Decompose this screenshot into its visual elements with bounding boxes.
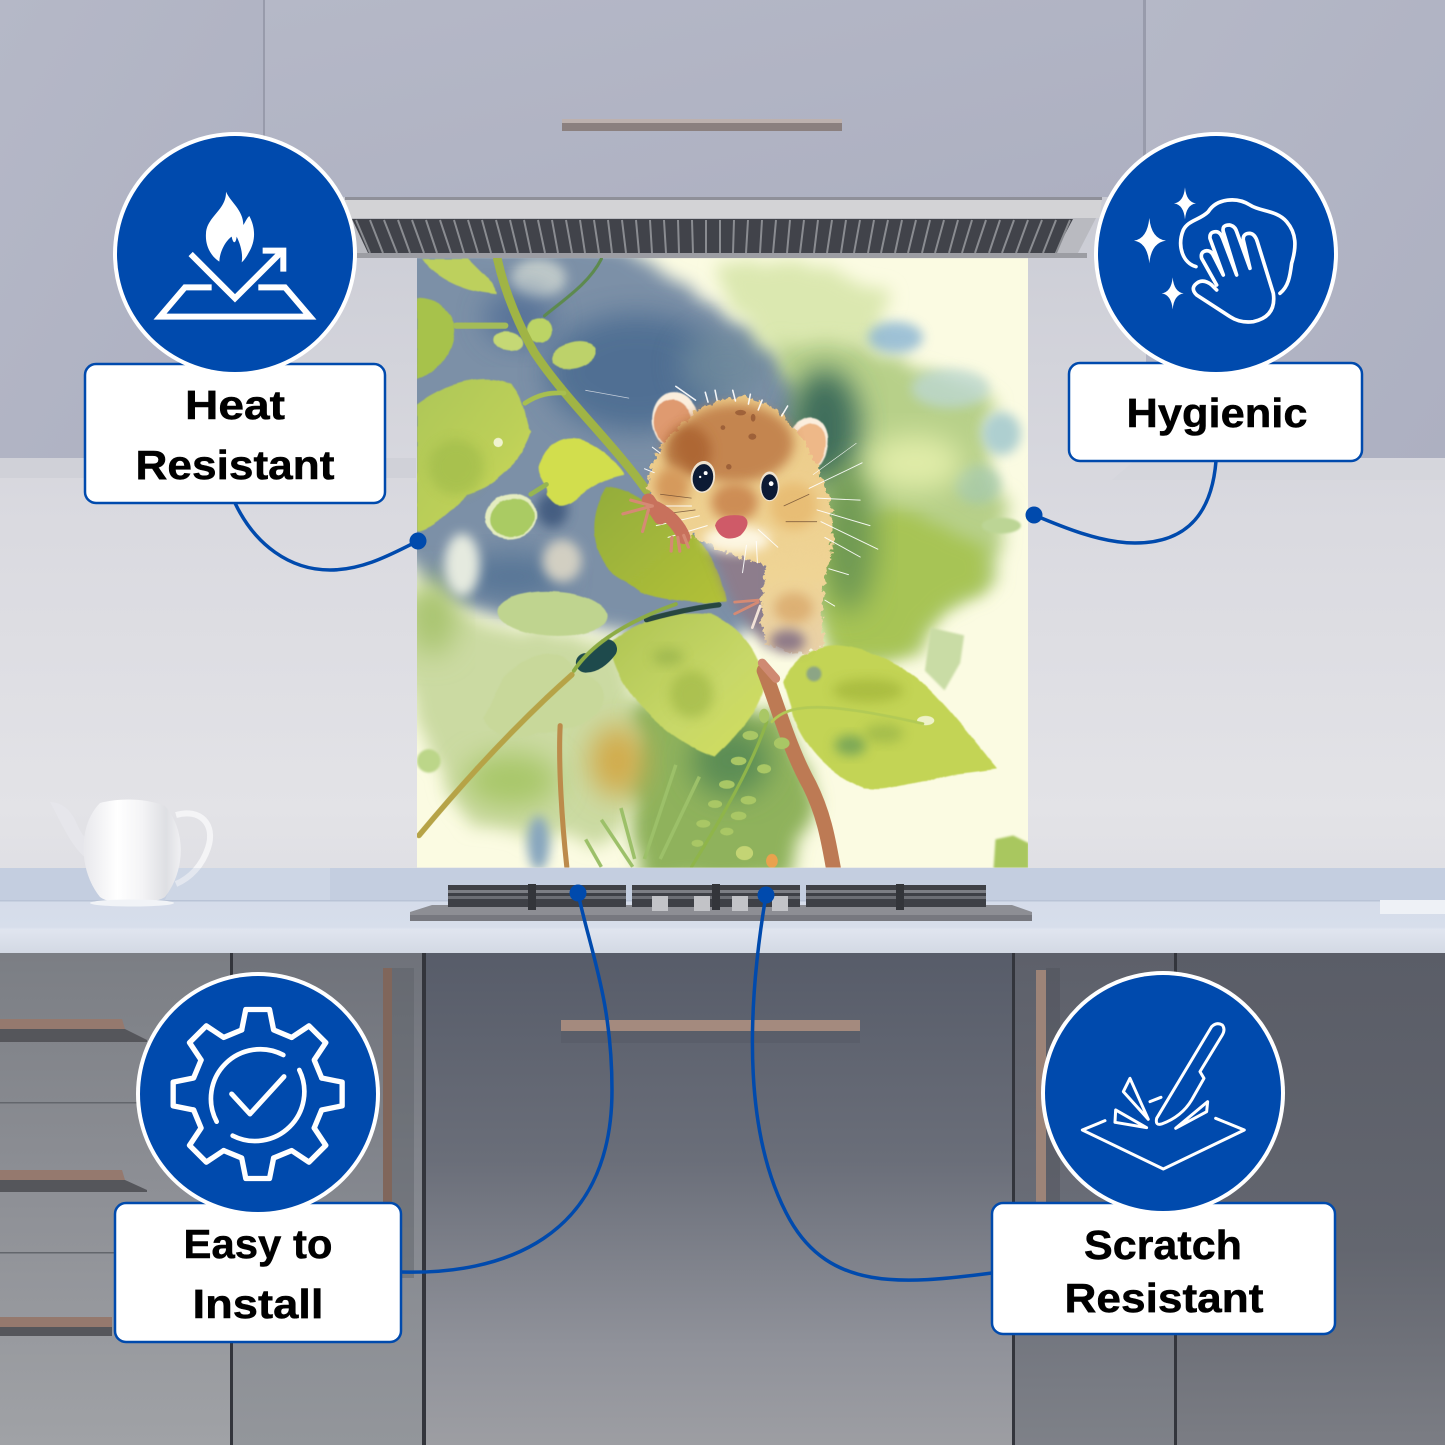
countertop — [0, 868, 1445, 953]
label text — [184, 1221, 332, 1327]
lower cabinets — [0, 953, 1445, 1445]
label box — [1069, 363, 1362, 461]
fur specks — [721, 410, 756, 470]
whiskers and fur — [586, 386, 878, 606]
upper cabinets — [0, 0, 1445, 480]
cabinet handle: upper — [562, 119, 842, 131]
mouse head and body — [648, 396, 833, 654]
icon badge: wiping hand — [1094, 132, 1338, 376]
label text: Install — [192, 1281, 324, 1327]
stems — [419, 259, 923, 869]
callout: heat resistant — [85, 132, 385, 503]
grass at the bottom — [586, 765, 699, 867]
label box — [85, 364, 385, 503]
mouse nose — [715, 515, 748, 539]
connector: scratch resistant — [752, 886, 992, 1280]
label text: Resistant — [136, 442, 335, 488]
icon badge: gear with check — [136, 972, 380, 1216]
icon badge: knife scratching surface — [1041, 971, 1285, 1215]
callout: hygienic — [1069, 132, 1362, 461]
label text: Scratch — [1084, 1222, 1242, 1268]
head shading — [654, 404, 817, 653]
grey-violet chest behind paws — [709, 545, 770, 651]
icon badge: flame — [113, 132, 357, 376]
dark whisker strokes — [660, 494, 817, 522]
connector: hygienic — [1026, 461, 1216, 543]
painting paper — [417, 258, 1028, 868]
dormouse — [586, 386, 878, 679]
label text: Heat — [185, 382, 285, 428]
callout: scratch resistant — [992, 971, 1335, 1334]
mouse ears — [650, 391, 829, 466]
extractor hood — [345, 197, 1102, 258]
mouse eyes — [689, 459, 779, 501]
leaves — [417, 259, 997, 789]
muzzle — [703, 526, 770, 553]
teapot — [50, 800, 330, 906]
mouse paws — [623, 500, 776, 679]
label text: Easy to — [184, 1221, 332, 1267]
connector: easy to install — [401, 884, 612, 1272]
label text: Hygienic — [1126, 390, 1308, 436]
fern fronds — [692, 709, 790, 868]
label text: Resistant — [1064, 1275, 1264, 1321]
label box — [992, 1203, 1335, 1334]
artwork panel: watercolour dormouse — [393, 239, 1029, 883]
gas hob — [410, 884, 1032, 921]
connector: heat resistant — [235, 503, 426, 570]
callout: easy to install — [115, 972, 401, 1342]
label box — [115, 1203, 401, 1342]
label text — [136, 382, 335, 488]
background: kitchen wall — [0, 0, 1445, 880]
label text — [1064, 1222, 1264, 1321]
cabinet handles: lower — [0, 968, 1046, 1336]
watercolour washes — [393, 239, 1029, 883]
leaf shading — [429, 438, 934, 755]
